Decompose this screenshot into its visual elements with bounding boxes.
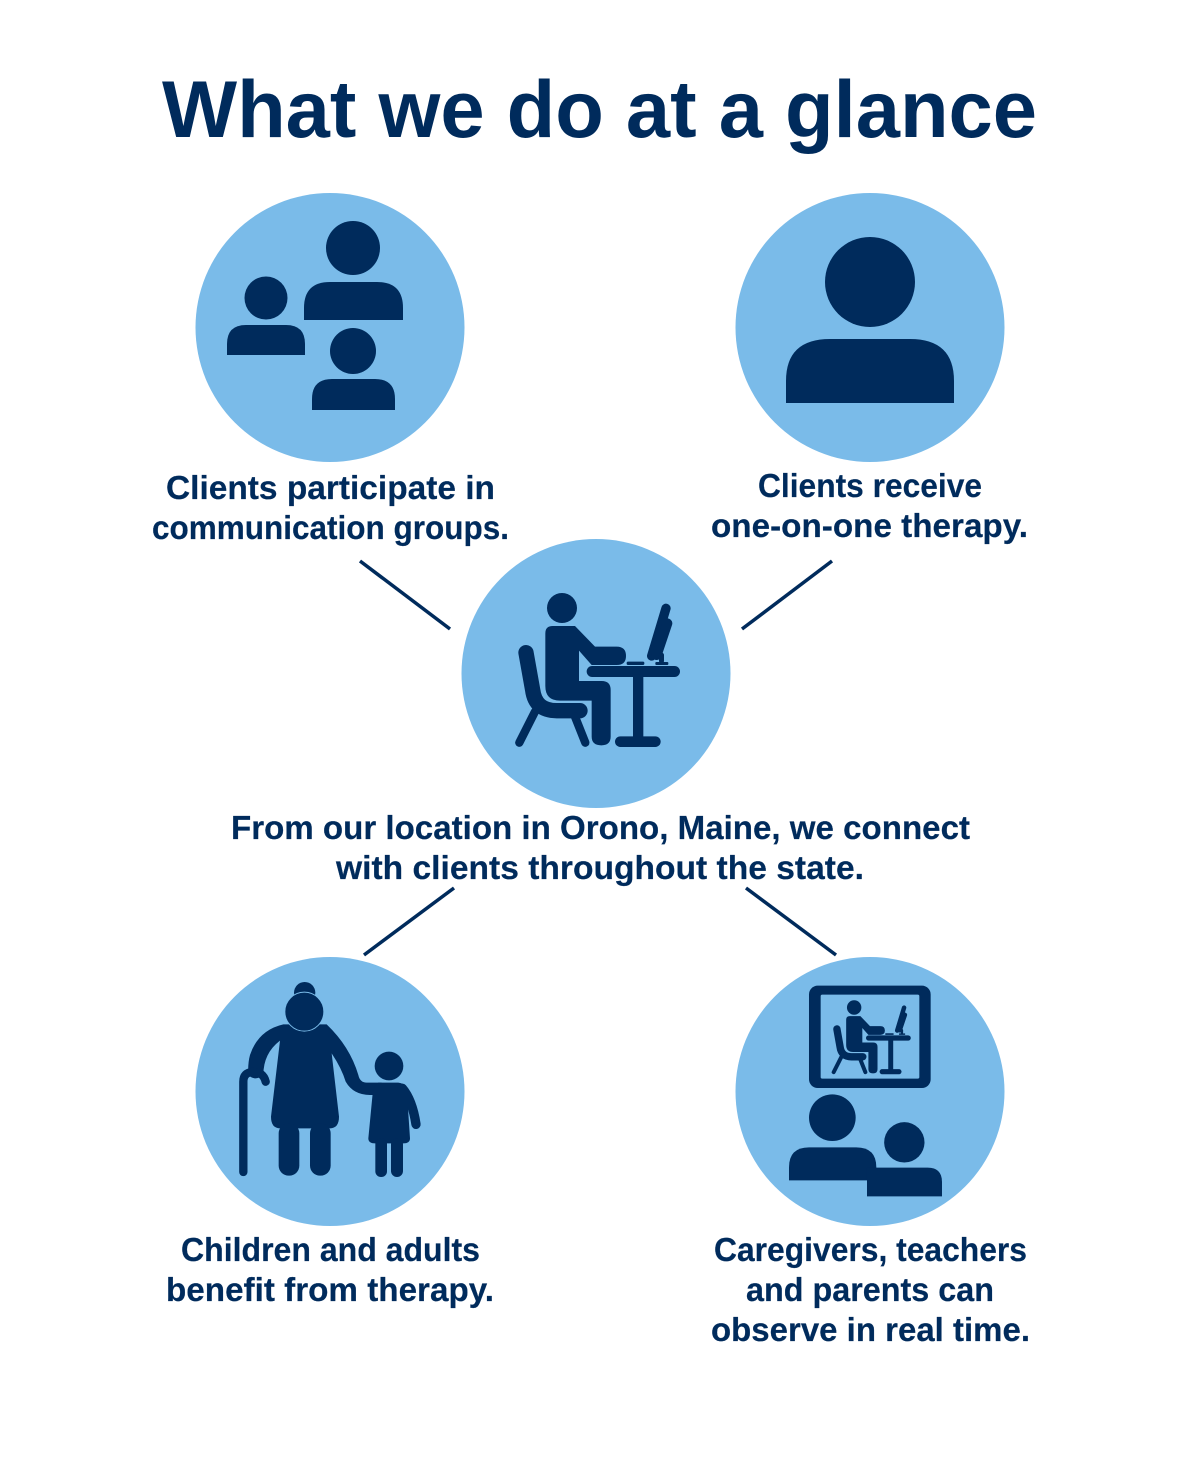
connector: one-on-one to centre (742, 561, 832, 629)
title: What we do at a glance (162, 65, 1037, 155)
caption: central location: with clients throughout the state. (335, 849, 864, 886)
icon: older woman with cane and child (243, 982, 416, 1177)
icon: two people watching a screen (789, 986, 942, 1196)
caption: one-on-one therapy (711, 467, 1028, 544)
caption: caregivers observe: and parents can (746, 1271, 994, 1308)
caption: children and adults: Children and adults (181, 1231, 480, 1268)
caption: central location: From our location in Orono, Maine, we connect (231, 809, 970, 846)
panel: one-on-one therapy (711, 193, 1028, 544)
panel: children and adults (166, 957, 494, 1308)
caption: children and adults (166, 1231, 494, 1308)
connector: groups to centre (360, 561, 450, 629)
caption: communication groups (152, 469, 509, 546)
caption: communication groups: communication groups. (152, 509, 509, 546)
icon: person seated at computer (519, 593, 680, 747)
caption: one-on-one therapy: Clients receive (758, 467, 982, 504)
caption: children and adults: benefit from therapy. (166, 1271, 494, 1308)
caption: communication groups: Clients participate in (166, 469, 495, 506)
icon: single person (786, 237, 954, 403)
caption: central location (231, 809, 970, 886)
caption: one-on-one therapy: one-on-one therapy. (711, 507, 1028, 544)
panel: central location (231, 539, 970, 886)
caption: caregivers observe (711, 1231, 1030, 1348)
icon: group of three people (227, 221, 403, 410)
panel: caregivers observe (711, 957, 1030, 1348)
caption: caregivers observe: observe in real time. (711, 1311, 1030, 1348)
panel: communication groups (152, 193, 509, 546)
connector: centre to caregivers (746, 888, 836, 955)
connector: centre to children and adults (364, 888, 454, 955)
caption: caregivers observe: Caregivers, teachers (714, 1231, 1027, 1268)
